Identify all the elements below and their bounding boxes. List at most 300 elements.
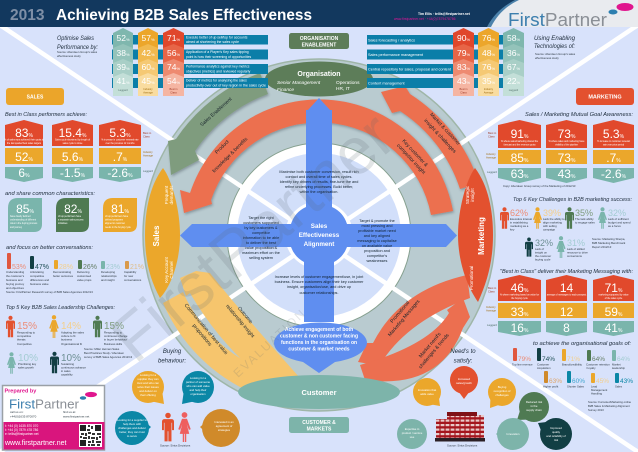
figures: 35% (482, 76, 495, 86)
bubble yellow: and deliver on (139, 389, 157, 393)
source note: Report 2012/13 (592, 245, 612, 249)
figures row two: 63% (549, 378, 562, 385)
source note (84, 347, 133, 359)
captions row one: Customer (537, 362, 549, 366)
bubble teal lower (115, 411, 151, 445)
panel: sales crescent: demands (169, 185, 174, 204)
ellipse: organisation: Finance (277, 87, 294, 93)
bubble red (450, 366, 478, 399)
panel: sales marketing mutual goal awareness: % where sales and marketing have (549, 140, 585, 143)
panel: optimise sales performance: Source: Aberdeen Group's sales (57, 50, 98, 54)
bar captions: Sales forecasting / analytics (368, 38, 415, 42)
panel: marketing crescent: Strategic (465, 185, 470, 204)
labels on arrows: Key customer & (401, 138, 429, 169)
text: lower inner block (275, 275, 364, 295)
labels on arrows: relationship insight (224, 304, 256, 340)
text: right inner block: on available value (362, 244, 392, 248)
tile column teal (503, 28, 524, 96)
contact details: +44(0)1635 870070 (10, 414, 37, 418)
card 85 percent (8, 198, 42, 232)
bubble yellow left (413, 378, 441, 406)
central title: Effectiveness (299, 232, 340, 239)
text: lower inner block: customer relationships. (299, 291, 339, 295)
figures: 26% (83, 264, 97, 271)
challenge 15 percent green: Responding to (104, 330, 122, 334)
challenge 14 percent yellow: culture to fit (61, 334, 76, 338)
arrow: market needs and trends (360, 298, 470, 381)
captions: better outcomes (53, 274, 74, 278)
bar captions (186, 36, 266, 88)
text: left inner block: to deliver the best (246, 241, 277, 245)
labels on arrows (183, 96, 461, 370)
labels on arrows: knowledge & benefits (211, 136, 250, 174)
challenge 39 percent: campaign (543, 228, 556, 232)
heading: satisfy: (454, 358, 473, 364)
watermark: EVALUATION (230, 306, 309, 380)
figures (12, 264, 144, 271)
panel: prepared by (2, 386, 104, 450)
magenta band text: t: +44 (0) 7879 478 786 (5, 428, 38, 432)
blue bars (112, 35, 268, 88)
challenge 10 percent dark: Sustaining (61, 362, 75, 366)
bubble dark: quality (552, 430, 561, 434)
bar captions: objectives (metrics) and reviewed regularly (186, 70, 251, 74)
bubble teal: Looking for a (190, 376, 207, 380)
row labels: Class (488, 290, 495, 294)
bars (7, 253, 129, 269)
captions row one: Top line revenue (512, 362, 533, 366)
inner light blue disc (237, 153, 401, 317)
heading: Using Enabling (534, 36, 576, 42)
challenge 62 percent: in establishing (510, 220, 528, 224)
heading (450, 349, 476, 364)
contact details: call us on: (10, 410, 24, 414)
bars row one (513, 348, 616, 361)
panel: top 6 marketing challenges (500, 197, 632, 262)
figures: 53% (12, 264, 26, 271)
heading (158, 349, 186, 364)
text: top inner block: refine underlying processes. Build better, (285, 185, 353, 189)
text: engagement ellipse: customer & non customer facing (280, 334, 358, 340)
card 81 percent: needs in the buying cycle (105, 226, 132, 229)
panel: enabling technologies (367, 28, 576, 96)
panel: best in class marketing messages: average of messages to each prospect (547, 294, 587, 296)
row labels: Class (488, 134, 495, 138)
card 81 percent: 81% (111, 202, 129, 216)
bubble orange: strategies (218, 428, 231, 432)
row labels: Average (486, 156, 496, 160)
panel: sales crescent (145, 168, 180, 298)
panel: sales crescent: Frequent (164, 185, 169, 204)
figures: 52% (15, 150, 33, 164)
tile footers (118, 87, 178, 94)
captions row one: Brand/credibility (562, 362, 582, 366)
captions: for new (124, 274, 134, 278)
card 85 percent: roles in the buying process (10, 222, 38, 225)
bubble yellow left: adds value (420, 392, 434, 396)
source note: Survey 2013 (588, 408, 604, 412)
figures (116, 33, 180, 86)
panel: sales marketing mutual goal awareness: visibility of the pipeline (555, 144, 579, 146)
bubble yellow: solve their issues (137, 385, 159, 389)
panel: sales crescent: Channel (169, 261, 174, 279)
bar captions: Deliver of metrics for analysing the sales (186, 78, 247, 82)
row labels: Average (486, 308, 496, 312)
figures: 54% (167, 76, 180, 86)
card 81 percent (103, 198, 137, 232)
captions row one (512, 362, 625, 370)
ellipse: organisation: Organisation (297, 71, 341, 78)
row labels: Laggard (487, 323, 497, 327)
panel: marketing crescent: insight (470, 188, 475, 202)
figures (511, 281, 623, 335)
bubble yellow: their offering (140, 393, 156, 397)
figures (4, 126, 139, 180)
captions row two: Higher profit (543, 384, 558, 388)
row labels (486, 286, 497, 327)
figures (511, 127, 627, 181)
labels on arrows: challenges & trends (418, 332, 451, 370)
figures: 48% (482, 48, 495, 58)
challenge 10 percent dark: capability (61, 372, 73, 376)
source note: B2B Sales & Marketing Alignment (588, 404, 630, 408)
figures: the last quarter/best sales targets (7, 142, 42, 145)
labels on arrows: Market need's (418, 331, 443, 359)
panel: enabling technologies: Source: Aberdeen Group's sales (535, 52, 576, 56)
bubble teal lower: challenges and deliver (118, 426, 146, 430)
captions: Articulating (30, 270, 44, 274)
text: engagement ellipse: Achieve engagement of both (285, 327, 353, 333)
figures: 43% (457, 76, 470, 86)
label: marketing: MARKETING (588, 94, 622, 100)
source note: Source: Forrester/Marketing online (588, 400, 632, 404)
figures row one: 64% (617, 356, 630, 363)
row labels: Class (143, 134, 150, 138)
challenge 62 percent: Executive interest (510, 217, 532, 221)
figures: 6% (18, 166, 30, 180)
watermark: FirstPartner (96, 97, 408, 376)
panel: organisational goals (512, 341, 633, 412)
figures: 71% (605, 281, 623, 295)
captions row two: Shorter Sales (567, 384, 585, 388)
bubble teal: who can add value (186, 384, 210, 388)
challenge 15 percent red: Responding to (17, 330, 35, 334)
figures row one: 64% (592, 356, 605, 363)
logo: FirstPartner (9, 396, 80, 412)
card 85 percent: have clearly defined (10, 215, 31, 218)
bubble teal lower: help them with (123, 422, 141, 426)
label: marketing (576, 88, 634, 105)
challenge 10 percent teal: sales growth (18, 366, 34, 370)
bubble teal lower: to serve (127, 434, 137, 438)
figures (457, 33, 520, 86)
bar captions: Sales performance management (368, 53, 424, 57)
labels on arrows: Promotional (389, 300, 411, 325)
bubble teal: and help their (190, 388, 207, 392)
bubble yellow: trust and who can (137, 381, 159, 385)
challenge 31 percent (556, 236, 588, 258)
panel: needs to satisfy (397, 349, 572, 450)
heading: customer and markets: MARKETS (307, 426, 332, 432)
captions: conversations (124, 278, 142, 282)
challenge 10 percent dark: 10% (61, 353, 81, 364)
arrow: promotional marketing messages (358, 275, 470, 367)
tile footers (460, 87, 519, 94)
row labels: Laggard (143, 169, 153, 173)
yellow tiles (498, 303, 634, 318)
heading: behaviour: (158, 358, 186, 364)
source note: Best Practices Study / Aberdeen (84, 351, 125, 355)
central title (299, 223, 340, 248)
bubble green: Reduced risk (526, 400, 543, 404)
text: right inner block: Target & promote the (359, 219, 395, 223)
yellow tiles (498, 150, 634, 164)
challenge 32 percent: as a focus (608, 224, 621, 228)
source note: B2B Marketing Benchmark (592, 241, 626, 245)
text: engagement ellipse (280, 327, 358, 352)
bubble yellow right: challenges (495, 393, 509, 397)
heading: Optimise Sales (57, 36, 94, 42)
figures: 76% (482, 33, 495, 43)
red tiles (5, 120, 141, 146)
source note: Source: Sirius Decisions (160, 444, 191, 448)
heading: organisation enablement: ORGANISATION (300, 36, 339, 42)
panel: best in class marketing messages: the buying cycle (511, 297, 528, 300)
text: engagement ellipse: functions in the organisation on (281, 340, 357, 346)
card 81 percent: defined programs (105, 218, 124, 222)
label: sales (6, 88, 64, 105)
challenge 15 percent red: Competitive (17, 342, 32, 346)
figures: 15.4% (59, 126, 87, 140)
captions row one: leadership (612, 366, 625, 370)
captions row one: Acquisition (537, 366, 551, 370)
text: top inner block: within the organisation. (300, 190, 338, 194)
yellow tiles (5, 148, 141, 164)
bubble red: sales/growth (456, 381, 472, 385)
tile column yellow (138, 28, 158, 96)
heading: customer and markets: CUSTOMER & (302, 420, 336, 426)
figures: 36% (507, 48, 520, 58)
outer ring (143, 59, 495, 411)
challenge 32 percent dark: Lack of (535, 247, 544, 251)
tile column yellow (478, 28, 499, 96)
panel: optimise sales performance (57, 28, 268, 96)
challenge 62 percent: 62% (510, 208, 528, 218)
bubble teal: partner of someone (186, 380, 211, 384)
arrow: communication of best value propositions (163, 292, 290, 401)
source note: Copy: Aberdeen Group survey of the Marketing of 2012/13 (503, 184, 576, 188)
magenta band text: t: +44 (0) 1635 870 070 (5, 424, 38, 428)
bubble red: Increased (458, 377, 471, 381)
card 82 percent: of top performers have (58, 215, 82, 218)
figures: 60% (141, 62, 155, 72)
captions row one: Customer retention (586, 362, 610, 366)
text: left inner block: selling system (249, 256, 273, 260)
arrow: product knowledge to key customer insight (180, 99, 453, 215)
bar captions: Central repository for sales, proposal and content (368, 68, 452, 72)
ellipse: organisation: Senior Management (277, 80, 321, 86)
bubble orange (200, 409, 240, 447)
captions row two: Sales (615, 384, 623, 388)
QR code (79, 424, 102, 447)
text: right inner block: messaging to capitalise (357, 239, 397, 243)
panel: best in class marketing messages: marketing supported by value (598, 294, 629, 296)
challenge 15 percent green (93, 316, 128, 346)
bubble orange: agreement of (216, 424, 232, 428)
figures: 73% (558, 127, 576, 141)
bar captions: Performance analytics against key metrics (186, 64, 250, 68)
teal tiles (5, 167, 141, 182)
text: top inner block (279, 170, 359, 194)
challenge 10 percent teal: 10% (18, 353, 38, 364)
figures: sales cycle to close (63, 142, 83, 145)
challenge 35 percent: to engage sales (575, 220, 595, 224)
source note (588, 400, 632, 412)
bar captions: point is how their screening of opportunities (186, 55, 252, 59)
ellipse: organisation: HR, IT (336, 86, 350, 92)
panel: sales marketing mutual goal awareness: % where sales/marketing shared the (501, 140, 539, 143)
figures: 73% (558, 151, 576, 165)
challenge 10 percent teal: Prioritising key (18, 362, 37, 366)
header band: www.firstpartner.net · +44(0)7879478786 (394, 17, 456, 21)
bubble teal left: use (410, 435, 415, 439)
challenge 39 percent (533, 207, 565, 232)
bar captions: Application of a Player's Key sales tipping (186, 50, 249, 54)
panel: buying behaviour (115, 349, 240, 448)
bubble yellow (132, 371, 164, 404)
tile footers: Average (484, 90, 494, 94)
figures: 56% (167, 48, 180, 58)
figures: 33% (511, 305, 529, 319)
figures: 79% (457, 48, 470, 58)
red tiles (498, 275, 634, 301)
inner white ring (227, 143, 411, 327)
bubble yellow: Looking for a (140, 373, 157, 377)
header band: Achieving B2B Sales Effectiveness (56, 7, 312, 24)
figures: -1.5% (60, 166, 86, 180)
challenge 32 percent dark: insight on (535, 250, 547, 254)
figures row two (549, 378, 633, 385)
heading: Need's to (450, 349, 476, 355)
figures: 22% (507, 76, 520, 86)
bubble yellow right: Buying (498, 385, 507, 389)
figures: 63% (511, 167, 529, 181)
captions: and insight (101, 278, 115, 282)
bar captions: Execute better of up sell/top for accounts (186, 36, 248, 40)
challenge 10 percent dark: continuous advance (61, 366, 86, 370)
bubble dark: and reliability of (546, 434, 566, 438)
magenta band (4, 422, 104, 450)
text: lower inner block: insight, organisation/use, and drive up (287, 285, 351, 289)
row labels: Average (143, 154, 153, 158)
figures: 5.6% (62, 150, 84, 164)
challenge 31 percent: Lack of skilled (567, 247, 585, 251)
row labels: Industry (143, 150, 153, 154)
challenge 32 percent: 32% (608, 208, 626, 218)
challenge 31 percent: 31% (567, 238, 585, 248)
panel: better conversations (6, 245, 144, 294)
challenge 15 percent red: threats (17, 338, 26, 342)
heading: and focus on better conversations: (6, 245, 93, 251)
captions: customised (77, 274, 92, 278)
tile footers: Class (460, 90, 467, 94)
card 81 percent: of top performers have (105, 215, 129, 218)
captions row two: Management (591, 388, 608, 392)
figures: .7% (606, 151, 621, 165)
challenge 32 percent dark: buying cycle (535, 258, 551, 262)
challenge 35 percent: The lack ability (575, 217, 594, 221)
figures: 39% (116, 62, 130, 72)
bars row two (544, 371, 619, 383)
captions: business value (30, 282, 49, 286)
panel: best in class marketing messages: of the sales cycle (605, 297, 623, 300)
heading: Best in Class performers achieve: (5, 112, 87, 118)
figures: 43% (558, 167, 576, 181)
bar captions: Content management (368, 82, 405, 86)
contact details: www.firstpartner.net (63, 414, 90, 418)
bubble teal left: Expertise in (405, 427, 420, 431)
labels on arrows: Outcome (236, 306, 254, 325)
heading: organisation enablement: ENABLEMENT (302, 42, 336, 48)
figures: -2.6% (107, 166, 133, 180)
figures: 71% (167, 33, 180, 43)
challenge 31 percent: conversions (567, 254, 583, 258)
source note: Source: Sirius Decisions (447, 444, 478, 448)
challenge 10 percent dark (50, 352, 86, 376)
text: right inner block: proposition and (364, 249, 390, 253)
figures: 16% (511, 321, 529, 335)
figures: Sales cycle shortened by length of (55, 138, 90, 142)
labels on arrows: insight & challenges (422, 118, 457, 155)
figures: 23% (106, 264, 120, 271)
captions: the customer's (6, 274, 25, 278)
tile column teal (113, 28, 133, 96)
text: right inner block (357, 219, 397, 263)
contact details: find us at: (63, 410, 76, 414)
heading: Sales / Marketing Mutual Goal Awareness: (525, 112, 633, 118)
challenge 10 percent teal (7, 352, 38, 374)
source note (592, 237, 626, 249)
challenge 62 percent: marketing as a (510, 224, 529, 228)
figures: 57% (141, 33, 155, 43)
figures: 5.3% (109, 126, 131, 140)
header logo: FirstPartner (508, 10, 607, 30)
figures: 38% (116, 48, 130, 58)
blue bars (367, 35, 524, 88)
challenge 14 percent yellow: 14% (61, 321, 81, 332)
row labels (486, 131, 497, 174)
row labels: Industry (486, 152, 496, 156)
figures: 8 (563, 321, 570, 335)
challenge 39 percent: with selling (543, 224, 557, 228)
challenge 14 percent yellow: business (61, 338, 73, 342)
source note: Source: Miller Heiman Sales (84, 347, 120, 351)
challenge 35 percent: 35% (575, 208, 593, 218)
figures: % of sales reps achieved their quota in (4, 138, 44, 142)
bubble teal right (496, 418, 529, 450)
bubble teal left: product / service (402, 431, 423, 435)
challenge 35 percent (565, 207, 595, 229)
captions: Delivering (77, 270, 90, 274)
captions: competitive (30, 274, 45, 278)
heading: "Best in Class" deliver their Marketing Messaging with: (500, 269, 633, 275)
figures: 52% (116, 33, 130, 43)
challenge 14 percent yellow: Adapting the sales (61, 330, 85, 334)
card 82 percent: a separate sales process (58, 218, 84, 222)
figures: 83% (15, 126, 33, 140)
bar captions (368, 38, 452, 86)
ellipse: customer (238, 375, 400, 409)
